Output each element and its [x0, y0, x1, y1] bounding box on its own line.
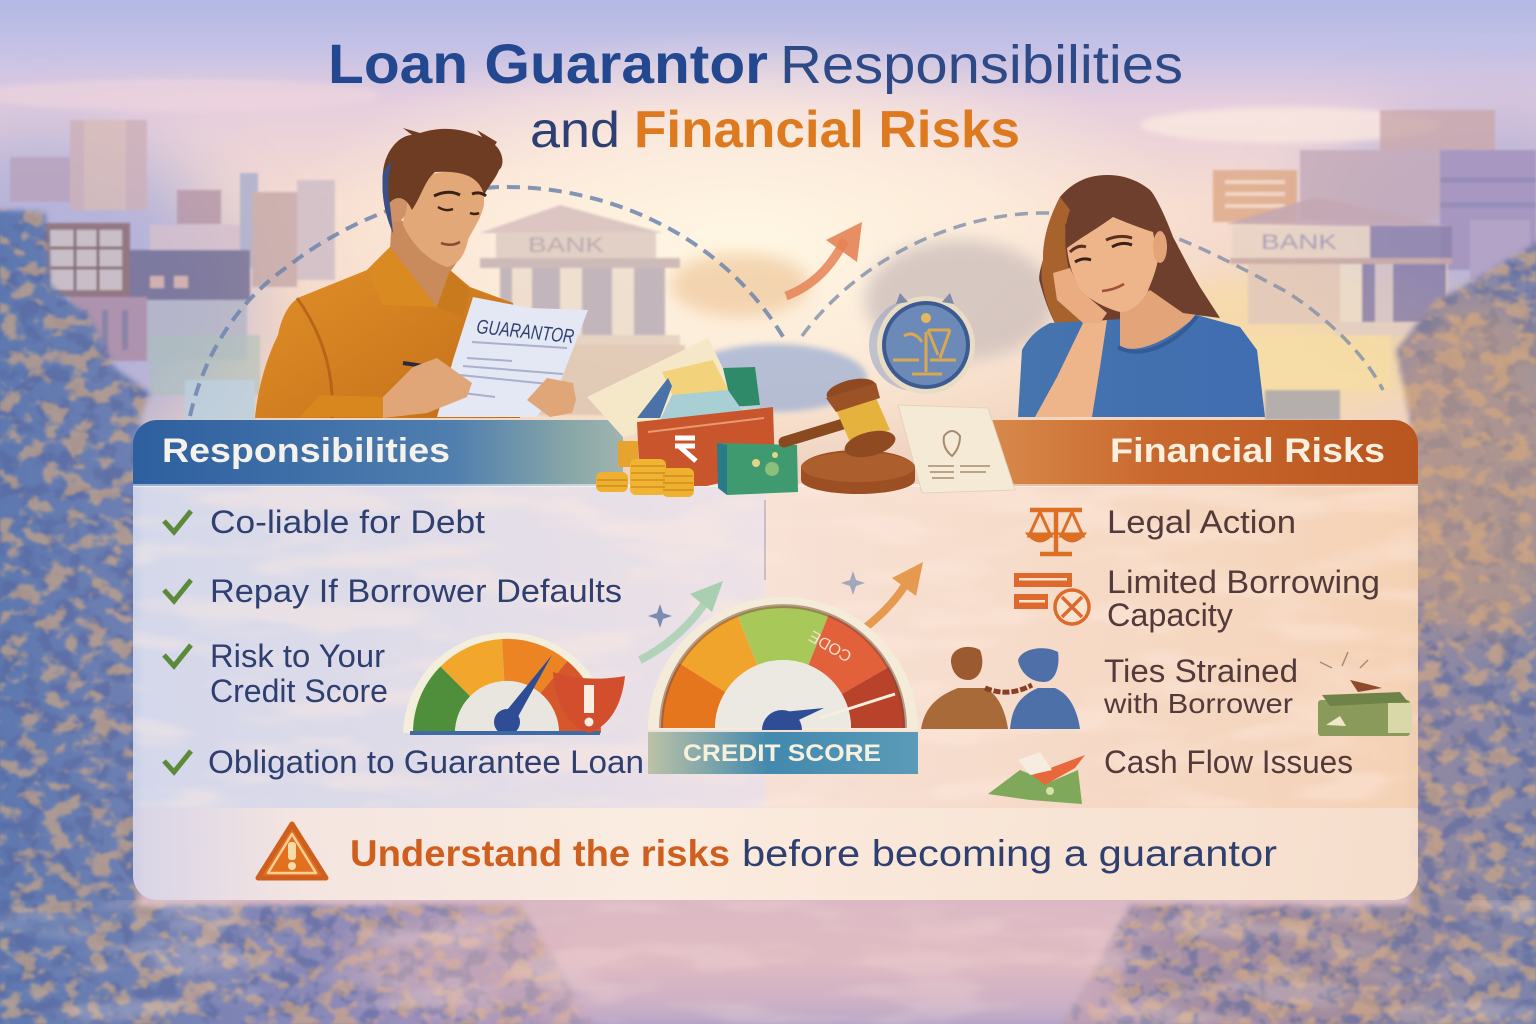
icon: crumpled cash — [988, 752, 1085, 804]
check: credit score — [164, 645, 191, 666]
icon: legal scales — [1028, 510, 1084, 554]
item: credit score: Credit Score — [210, 673, 388, 709]
background: right city skyline — [1213, 110, 1536, 280]
list: responsibilities — [164, 504, 644, 780]
arrow: rising orange — [786, 222, 862, 296]
heading: responsibilities: Responsibilities — [162, 432, 450, 470]
panel: main card — [133, 420, 1418, 900]
check: repay — [164, 580, 191, 601]
band: credit score label — [648, 732, 918, 774]
band: credit score label: CREDIT SCORE — [683, 740, 881, 767]
item: credit score: Risk to Your — [210, 638, 385, 674]
icon: alert shield — [553, 672, 625, 733]
item: limited borrowing: Limited Borrowing — [1107, 564, 1380, 600]
title: and — [530, 102, 620, 158]
illustration: guarantor and borrower chained — [921, 647, 1080, 729]
icon: scales medal — [869, 293, 975, 394]
check: obligation — [164, 751, 191, 772]
item: cash flow: Cash Flow Issues — [1104, 744, 1353, 780]
callout: warning message — [258, 824, 1277, 878]
text: guarantor on paper: GUARANTOR — [475, 316, 575, 348]
list: financial risks — [1103, 504, 1380, 780]
item: ties strained: Ties Strained — [1104, 653, 1298, 689]
text: warning message: before becoming a guarantor — [742, 833, 1277, 874]
background: right bank building — [1226, 197, 1453, 420]
item: co-liable: Co-liable for Debt — [210, 504, 485, 540]
gauge: small risk meter — [403, 632, 625, 735]
background: left city skyline — [10, 120, 335, 420]
background: right bank building: BANK — [1261, 231, 1337, 254]
background: central hills and road — [670, 240, 1055, 422]
item: obligation: Obligation to Guarantee Loan — [208, 744, 644, 780]
item: limited borrowing — [1107, 564, 1380, 633]
item: ties strained — [1103, 653, 1298, 719]
background: central bank building — [480, 205, 685, 415]
gauge: main credit score — [648, 597, 918, 774]
illustration: wallet with coins and cash — [587, 338, 798, 497]
arrow: green rising — [640, 581, 723, 660]
arrow: orange rising — [841, 562, 923, 628]
illustration: judge gavel and legal document — [784, 374, 1015, 494]
item: credit score — [210, 638, 388, 709]
dashed arc right — [802, 213, 1383, 390]
dashed arc left — [190, 187, 785, 416]
text: warning message: Understand the risks — [350, 833, 730, 874]
icon: warning triangle — [258, 824, 326, 878]
icon: broken wallet — [1318, 652, 1412, 736]
background: central bank building: BANK — [528, 234, 604, 257]
check: co-liable — [164, 511, 191, 532]
figure: man reading guarantor form — [255, 128, 588, 418]
text: gauge label: CODE — [806, 627, 855, 664]
item: ties strained: with Borrower — [1103, 688, 1293, 719]
item: repay: Repay If Borrower Defaults — [210, 573, 622, 609]
title: Financial Risks — [634, 101, 1020, 159]
title: Loan Guarantor — [328, 32, 768, 95]
heading: financial risks: Financial Risks — [1110, 432, 1385, 470]
title: Responsibilities — [780, 35, 1183, 95]
background: misty ground below panel — [0, 900, 1536, 1024]
figure: worried woman — [1018, 175, 1265, 417]
item: legal action: Legal Action — [1107, 504, 1296, 540]
icon: limited credit — [1014, 573, 1089, 624]
item: limited borrowing: Capacity — [1107, 597, 1233, 633]
title — [328, 32, 1183, 159]
text: warning message — [350, 833, 1277, 874]
